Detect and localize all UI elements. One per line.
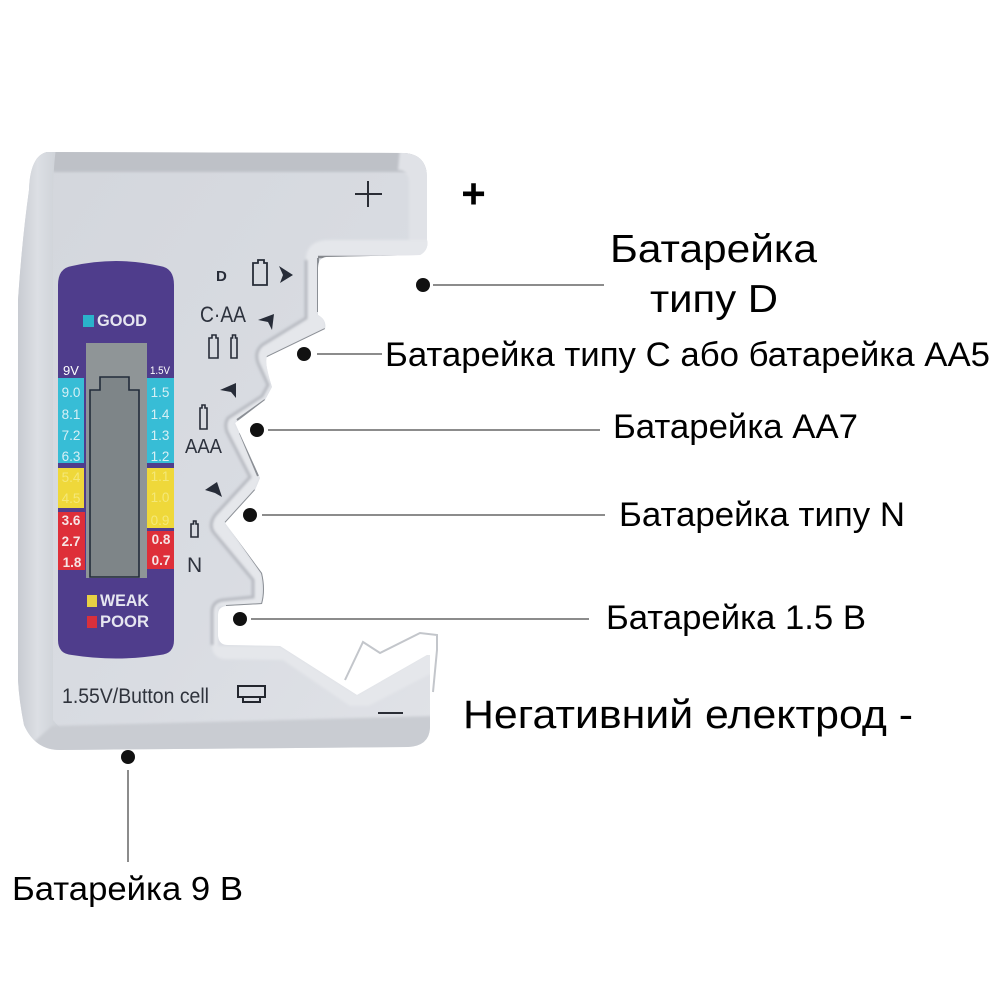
1.5V scale: 1.0 [151, 490, 169, 505]
icon: D battery slot [216, 260, 293, 285]
callout: D battery: Батарейка [610, 228, 817, 271]
LCD window [86, 343, 147, 578]
button cell label: 1.55V/Button cell [62, 685, 209, 708]
spring contact [345, 633, 437, 692]
1.5V scale: 1.5 [151, 385, 169, 400]
plus label: + [461, 170, 486, 217]
9V scale: 8.1 [62, 407, 80, 422]
callout: D battery [416, 228, 817, 321]
9V scale: 9V [63, 363, 79, 378]
poor legend: POOR [100, 613, 149, 631]
purple scale panel [58, 261, 174, 658]
callout: D battery: типу D [650, 278, 778, 321]
icon: C AA battery slot [200, 302, 274, 358]
icon: C AA battery slot: C·AA [200, 302, 246, 327]
9V scale: 3.6 [62, 513, 81, 528]
1.5V scale: 0.7 [152, 553, 170, 568]
icon: AAA battery slot [185, 383, 236, 458]
1.5V scale: 0.8 [152, 532, 171, 547]
1.5V scale: 1.3 [151, 428, 169, 443]
9V scale: 2.7 [62, 534, 80, 549]
icon: AAA battery slot: AAA [185, 436, 223, 458]
device body [10, 148, 434, 760]
1.5V scale: 1.5V [150, 365, 171, 377]
icon: button cell [238, 686, 265, 702]
9V scale: 9.0 [62, 385, 80, 400]
1.5V scale: 1.4 [151, 407, 170, 422]
device minus mark [378, 712, 403, 714]
1.5V scale: 1.2 [151, 449, 169, 464]
9V scale: 4.5 [62, 491, 80, 506]
callout: N battery [243, 496, 905, 534]
1.5V scale: 1.1 [151, 469, 169, 484]
weak legend: WEAK [100, 592, 149, 610]
callout: AA7 battery [250, 408, 858, 446]
icon: D battery slot: D [216, 268, 227, 285]
9V scale: 1.8 [63, 555, 82, 570]
icon: N battery slot: N [187, 554, 202, 577]
good legend: GOOD [97, 312, 147, 330]
9V scale: 7.2 [62, 428, 80, 443]
9V scale [58, 363, 85, 570]
callout: 9 V battery: Батарейка 9 В [12, 870, 243, 907]
callout: 1.5 V battery [233, 599, 866, 637]
callout: N battery: Батарейка типу N [619, 496, 905, 534]
1.5V scale: 0.9 [151, 513, 169, 528]
callout: 1.5 V battery: Батарейка 1.5 В [606, 599, 866, 637]
9V scale: 6.3 [62, 449, 80, 464]
9V scale: 5.4 [62, 470, 81, 485]
callout: C or AA5 battery: Батарейка типу C або батарейка AA5 [385, 336, 990, 374]
callout: AA7 battery: Батарейка AA7 [613, 408, 858, 446]
callout: 9 V battery [12, 750, 243, 907]
1.5V scale [147, 365, 174, 569]
negative electrode label: Негативний електрод - [463, 693, 913, 737]
icon: N battery slot [187, 482, 222, 577]
device plus mark [355, 181, 382, 207]
